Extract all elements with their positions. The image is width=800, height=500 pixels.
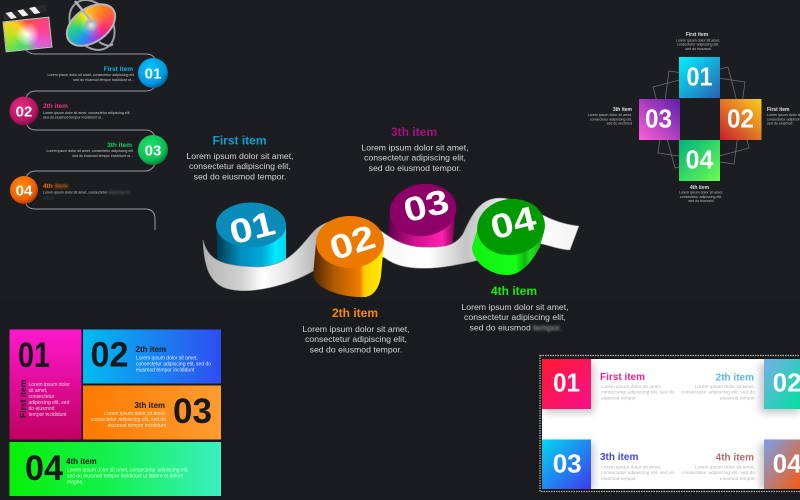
tile 01 (542, 359, 675, 409)
tile 02 (682, 359, 800, 409)
block 01: 01 (18, 336, 50, 375)
caption 3th item: 3th item (391, 125, 437, 139)
block 03: Lorem ipsum dolor sit amet, (104, 411, 166, 417)
tile 02: consectetur adipiscing elit, sed do (682, 390, 755, 396)
timeline connector (26, 50, 155, 230)
tile 04: eiusmod tempor (720, 476, 755, 482)
tile 03: consectetur adipiscing elit, sed do (601, 470, 675, 476)
tile 02: eiusmod tempor (720, 396, 755, 402)
icon: clapperboard app logo (2, 4, 52, 52)
3D cylinder ribbon infographic (186, 125, 579, 354)
block 01: Lorem ipsum dolor (28, 382, 70, 388)
block 03: 3th item (134, 401, 165, 410)
step 02: 02 (16, 104, 32, 120)
step 02: sed do eiusmod tempor incididunt ut... (43, 116, 104, 120)
caption 3th item: consectetur adipiscing elit, (364, 152, 466, 162)
square 04: 04 (686, 144, 714, 174)
tile 03: Lorem ipsum dolor sit amet, (601, 464, 661, 470)
step 02 (10, 96, 130, 126)
label right (767, 107, 800, 126)
step 01: sed do eiusmod tempor incididunt ut... (73, 78, 134, 82)
tile shadows (544, 363, 800, 489)
block 01: adipiscing elit, sed (28, 400, 70, 406)
cross of squares infographic (588, 32, 800, 203)
block 02 (83, 330, 221, 384)
block 02: eiusmod tempor incididunt (136, 368, 195, 374)
caption first item: consectetur adipiscing elit, (189, 161, 291, 171)
square 01 (679, 57, 720, 98)
block 03: 03 (173, 392, 212, 431)
block 01: tempor incididunt (28, 412, 67, 418)
block 04: 04 (25, 449, 64, 488)
cylinder 02 (313, 216, 384, 297)
caption 2th item: consectetur adipiscing elit, (305, 334, 407, 344)
cylinder 01 (216, 202, 286, 276)
background mountains (0, 300, 800, 500)
label top: First item (686, 32, 709, 38)
square 03 (639, 99, 680, 140)
tile 01: First item (600, 372, 645, 383)
step 03: 03 (145, 142, 161, 160)
step 03: Lorem ipsum dolor sit amet, consectetur adipiscing elit (46, 149, 133, 153)
block 01: do eiusmod (28, 406, 55, 412)
step 04: 4th (43, 183, 53, 190)
caption first item (186, 134, 294, 182)
colour block grid (10, 330, 221, 496)
block 04 (10, 442, 221, 496)
block 02: 02 (90, 336, 128, 374)
label left: sed do eiusmod (607, 122, 632, 126)
block 02: consectetur adipiscing elit, sed do (136, 362, 211, 368)
caption 4th item (461, 284, 569, 332)
tile 04: consectetur adipiscing elit, sed do (682, 470, 755, 476)
caption 4th item: Lorem ipsum dolor sit amet, (461, 302, 569, 312)
square 02: 02 (727, 103, 754, 133)
caption 4th item: sed do eiusmod (470, 322, 531, 332)
tile 04 (682, 440, 800, 489)
tile 03: 3th item (600, 452, 638, 463)
tile 01: 01 (553, 368, 580, 398)
caption 2th item (302, 306, 410, 354)
step 01: Lorem ipsum dolor sit amet, consectetur adipiscing elit (48, 73, 134, 77)
square 02 (720, 99, 762, 140)
label left: Lorem ipsum dolor sit amet, (588, 113, 632, 117)
square 03: 03 (645, 103, 672, 133)
label bottom: consectetur adipiscing elit, (680, 195, 722, 199)
cylinder 02: 02 (325, 217, 380, 267)
tile 02: Lorem ipsum dolor sit amet, (695, 384, 755, 390)
cylinder 03: 03 (400, 182, 453, 230)
tile 03: 03 (553, 448, 582, 478)
caption 2th item: 2th item (332, 306, 378, 320)
step 03: 3th item (107, 142, 132, 149)
label left: 3th item (613, 107, 633, 113)
caption first item: Lorem ipsum dolor sit amet, (186, 151, 294, 161)
block 01: sit amet, (28, 388, 47, 394)
label left: consectetur adipiscing elit, (590, 118, 632, 122)
white panel (542, 359, 800, 489)
label bottom: sed do eiusmod (688, 199, 714, 203)
label right: sed do eiusmod (767, 122, 792, 126)
step 04: Lorem ipsum dolor sit amet, consectetur (43, 190, 108, 194)
step 04: item (54, 183, 68, 190)
cylinder 03 (386, 180, 460, 250)
tilted outline squares (653, 67, 749, 168)
label bottom (679, 185, 723, 203)
step 01: 01 (145, 66, 161, 82)
label left (588, 107, 633, 126)
label top: Lorem ipsum dolor sit amet, (676, 38, 720, 42)
block 04: magna. (67, 480, 84, 486)
label right: First item (767, 107, 790, 113)
cylinder 04: 04 (487, 199, 540, 247)
step 01 (48, 58, 168, 88)
tile 02: 2th item (716, 373, 754, 384)
block 01 (10, 330, 82, 440)
label bottom: 4th item (690, 185, 710, 191)
step 01: First item (104, 66, 133, 73)
square 01: 01 (686, 62, 712, 92)
icon: motion app logo (66, 0, 116, 51)
caption 4th item: tempor. (533, 322, 562, 332)
block 03 (83, 386, 221, 440)
dashed frame (540, 356, 800, 492)
tile 01: eiusmod tempor (601, 396, 636, 402)
step 04 (10, 176, 130, 204)
caption 3th item: Lorem ipsum dolor sit amet, (361, 142, 469, 152)
caption 3th item (361, 125, 469, 173)
step 03 (46, 135, 168, 165)
step 02: 2th item (43, 103, 68, 110)
caption 2th item: Lorem ipsum dolor sit amet, (302, 324, 410, 334)
caption first item: First item (212, 134, 267, 148)
cylinder 01: 01 (226, 204, 279, 252)
tile 04: Lorem ipsum dolor sit amet, (695, 464, 755, 470)
block 03: eiusmod tempor incididunt (108, 423, 167, 429)
caption 3th item: sed do eiusmod tempor. (369, 163, 461, 173)
white ribbon (203, 198, 579, 291)
tile 04: 4th item (716, 453, 754, 464)
block 04: 4th item (66, 457, 97, 466)
tile 01: consectetur adipiscing elit, sed do (601, 390, 675, 396)
block 04: sed do eiusmod tempor incididunt ut labore et dolore (67, 474, 184, 480)
block 01: consectetur (28, 394, 55, 400)
block 02: Lorem ipsum dolor sit amet, (136, 356, 198, 362)
tile 03: eiusmod tempor (601, 476, 636, 482)
block 02: 2th item (136, 345, 166, 354)
step 04: 04 (16, 182, 33, 200)
caption first item: sed do eiusmod tempor. (194, 172, 286, 182)
cylinder 04 (472, 195, 549, 275)
label top (676, 32, 720, 51)
label top: sed do eiusmod (685, 47, 711, 51)
step 04: sed do (43, 196, 54, 200)
block 01: First item (18, 379, 28, 418)
white card infographic (540, 356, 800, 492)
tile 01: Lorem ipsum dolor sit amet, (601, 384, 661, 390)
step 02: Lorem ipsum dolor sit amet, consectetur adipiscing elit (43, 111, 130, 115)
label bottom: Lorem ipsum dolor sit amet, (679, 190, 723, 194)
block 03: consectetur adipiscing elit, sed do (91, 417, 166, 423)
vertical timeline panel (10, 50, 168, 230)
label top: consectetur adipiscing elit, (677, 42, 719, 46)
block 04: Lorem ipsum dolor sit amet, consectetur adipiscing elit, (67, 468, 189, 474)
caption 4th item: consectetur adipiscing elit, (464, 312, 566, 322)
caption 4th item: 4th item (491, 284, 537, 298)
square 04 (679, 140, 720, 181)
step 04: adipiscing elit (108, 190, 130, 194)
caption 2th item: sed do eiusmod tempor. (310, 344, 402, 354)
step 03: sed do eiusmod tempor incididunt ut... (72, 154, 133, 158)
tile 03 (542, 440, 675, 489)
